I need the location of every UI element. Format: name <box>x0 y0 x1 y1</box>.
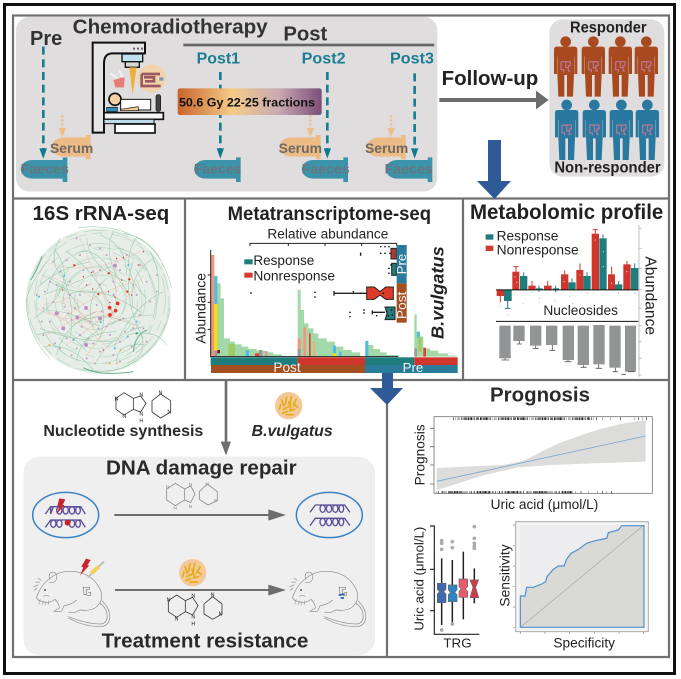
icon: purine and pyrimidine: H <box>139 419 143 425</box>
post divider line <box>183 44 434 46</box>
heading: Non-responder: Non-responder <box>554 160 661 177</box>
heading: Treatment resistance: Treatment resistance <box>102 630 308 652</box>
timepoint labels: Post2 <box>302 50 346 67</box>
nucleoside response bars <box>497 230 638 315</box>
serum labels: Serum <box>365 140 408 156</box>
icon: resistant mouse <box>289 571 366 627</box>
arrow: down to omics <box>477 140 511 199</box>
label: Nucleosides: Nucleosides <box>543 303 618 318</box>
faeces labels: Faeces <box>21 160 69 176</box>
arrow: repair <box>114 509 286 521</box>
faeces labels: Faeces <box>385 160 433 176</box>
abundance axis <box>208 250 398 357</box>
arrow: follow-up <box>439 91 549 109</box>
box plots by TRG <box>411 526 479 650</box>
icon: nucleobases black: N <box>191 593 195 599</box>
faeces labels: Faeces <box>302 160 350 176</box>
whiskers <box>442 552 474 625</box>
faeces tubes <box>21 157 432 182</box>
icon: damaged DNA cell <box>33 492 99 538</box>
timepoint labels <box>197 50 434 67</box>
heading: Pre: Pre <box>30 28 62 50</box>
heading: Follow-up: Follow-up <box>442 68 538 90</box>
baseline and divider <box>496 290 638 321</box>
serum labels: Serum <box>279 140 322 156</box>
icon: purine and pyrimidine <box>115 391 171 425</box>
timepoint labels: Post1 <box>197 50 240 67</box>
icon: nucleobases black: N <box>191 615 195 621</box>
icons: responder people <box>554 36 658 97</box>
icon: nucleobases black: N <box>219 612 223 618</box>
label: B.vulgatus: B.vulgatus <box>428 246 448 339</box>
icon: nucleobases grey: N <box>214 498 218 504</box>
icon: bacteria <box>275 392 302 419</box>
serum tubes <box>52 135 406 159</box>
icon: nucleobases grey: N <box>173 505 177 511</box>
label: Specificity: Specificity <box>553 635 615 650</box>
icon: nucleobases black: H <box>191 621 195 627</box>
legend: Nonresponse <box>497 242 579 257</box>
icon: purine and pyrimidine: N <box>139 411 143 417</box>
outliers <box>442 527 474 630</box>
heading: Responder: Responder <box>570 19 647 36</box>
follow-up and outcomes <box>439 19 664 177</box>
horizontal box plots <box>251 247 396 320</box>
panel: study timeline <box>16 15 437 192</box>
plot frame <box>516 522 648 632</box>
heading: Post: Post <box>283 24 328 46</box>
ROC line <box>520 526 644 627</box>
serum labels: Serum <box>50 140 93 156</box>
label: Prognosis axis: Prognosis <box>412 424 427 485</box>
panel: 16S rRNA-seq <box>26 203 172 374</box>
icon: treated mouse <box>33 559 110 627</box>
stacked abundance bars <box>211 255 457 357</box>
icon: radiotherapy machine <box>93 43 166 133</box>
area under curve <box>520 526 644 627</box>
line chart: uric acid vs prognosis <box>430 417 652 493</box>
right abundance axis <box>639 225 642 377</box>
upper region <box>520 525 644 627</box>
icon: purine and pyrimidine: N <box>122 414 126 420</box>
icon: nucleobases black: N <box>211 593 215 599</box>
icon: nucleobases grey <box>166 481 218 511</box>
serum labels <box>50 140 408 156</box>
serum dashed arrows <box>59 115 395 137</box>
label: Abundance: Abundance <box>642 256 659 335</box>
heading: Metabolomic profile: Metabolomic profile <box>470 200 663 224</box>
panel: Prognosis <box>412 385 652 512</box>
heading: Prognosis: Prognosis <box>490 385 590 407</box>
side bar: Pre and Post: Post <box>394 291 409 319</box>
group bar: timepoint: Pre <box>403 360 423 375</box>
network graph <box>26 227 172 374</box>
icon: purine and pyrimidine: N <box>167 410 171 416</box>
legend: Nonresponse <box>253 268 335 283</box>
radiation dose bar: 50.6 Gy 22-25 fractions <box>179 96 315 110</box>
timepoint labels: Post3 <box>390 50 434 67</box>
legend <box>486 228 579 257</box>
icon: nucleobases grey: N <box>189 482 193 488</box>
side bar: Pre and Post <box>394 245 409 323</box>
faeces labels <box>21 160 433 176</box>
label: Nucleotide synthesis: Nucleotide synthesis <box>43 423 203 440</box>
timeline background <box>16 17 437 192</box>
icon: nucleobases grey: N <box>189 504 193 510</box>
arrow: to repair panel <box>221 380 231 455</box>
panel: responder groups <box>549 19 664 177</box>
icon: nucleobases black: N <box>167 597 171 603</box>
icon: repaired DNA cell <box>296 492 362 538</box>
icon: purine and pyrimidine: N <box>159 391 163 397</box>
panel: mechanism <box>23 380 375 655</box>
group bar: timepoint: Post <box>273 360 301 375</box>
side bar: Pre and Post: Pre <box>394 254 409 274</box>
heading: 16S rRNA-seq: 16S rRNA-seq <box>33 203 169 225</box>
diagonal reference <box>520 525 644 627</box>
panel: Metatranscriptome-seq <box>193 204 458 375</box>
icon: bacteria <box>179 559 206 586</box>
grey abundance bars <box>499 325 636 374</box>
label: TRG: TRG <box>443 635 472 650</box>
faeces labels: Faeces <box>194 160 242 176</box>
label: Uric acid: Uric acid (μmol/L) <box>411 527 426 631</box>
legend: Response <box>497 228 558 243</box>
heading: Chemoradiotherapy: Chemoradiotherapy <box>73 15 268 38</box>
arrow: resistance <box>115 585 286 596</box>
ROC ticks <box>513 525 644 634</box>
icon: nucleobases grey: N <box>205 481 209 487</box>
label: B.vulgatus: B.vulgatus <box>252 423 333 440</box>
boxes <box>437 579 479 603</box>
faeces dashed arrows <box>39 47 418 159</box>
icon: purine and pyrimidine: N <box>115 397 119 403</box>
icons: non-responder people <box>555 100 659 160</box>
relative abundance axis: Relative abundance <box>267 226 388 241</box>
heading: DNA damage repair: DNA damage repair <box>106 457 297 479</box>
ROC curve <box>497 522 648 650</box>
legend <box>244 253 335 283</box>
group bar: timepoint <box>211 360 458 375</box>
group bar: response <box>211 357 458 365</box>
label: Sensitivity: Sensitivity <box>497 544 512 607</box>
panel: DNA damage repair <box>23 457 375 655</box>
icon: nucleobases grey: N <box>166 485 170 491</box>
label: Uric acid axis: Uric acid (μmol/L) <box>491 497 598 512</box>
icon: purine and pyrimidine: N <box>139 393 143 399</box>
icon: nucleobases black <box>167 593 223 627</box>
radiation dose bar <box>178 88 322 115</box>
icon: nucleobases black: N <box>175 617 179 623</box>
heading: Metatranscriptome-seq: Metatranscriptome-seq <box>228 204 431 225</box>
label: Abundance: Abundance <box>193 273 209 344</box>
axes <box>430 526 479 634</box>
legend: Response <box>253 253 314 268</box>
arrow: down to prognosis <box>370 373 403 405</box>
panel: Metabolomic profile <box>470 200 663 377</box>
